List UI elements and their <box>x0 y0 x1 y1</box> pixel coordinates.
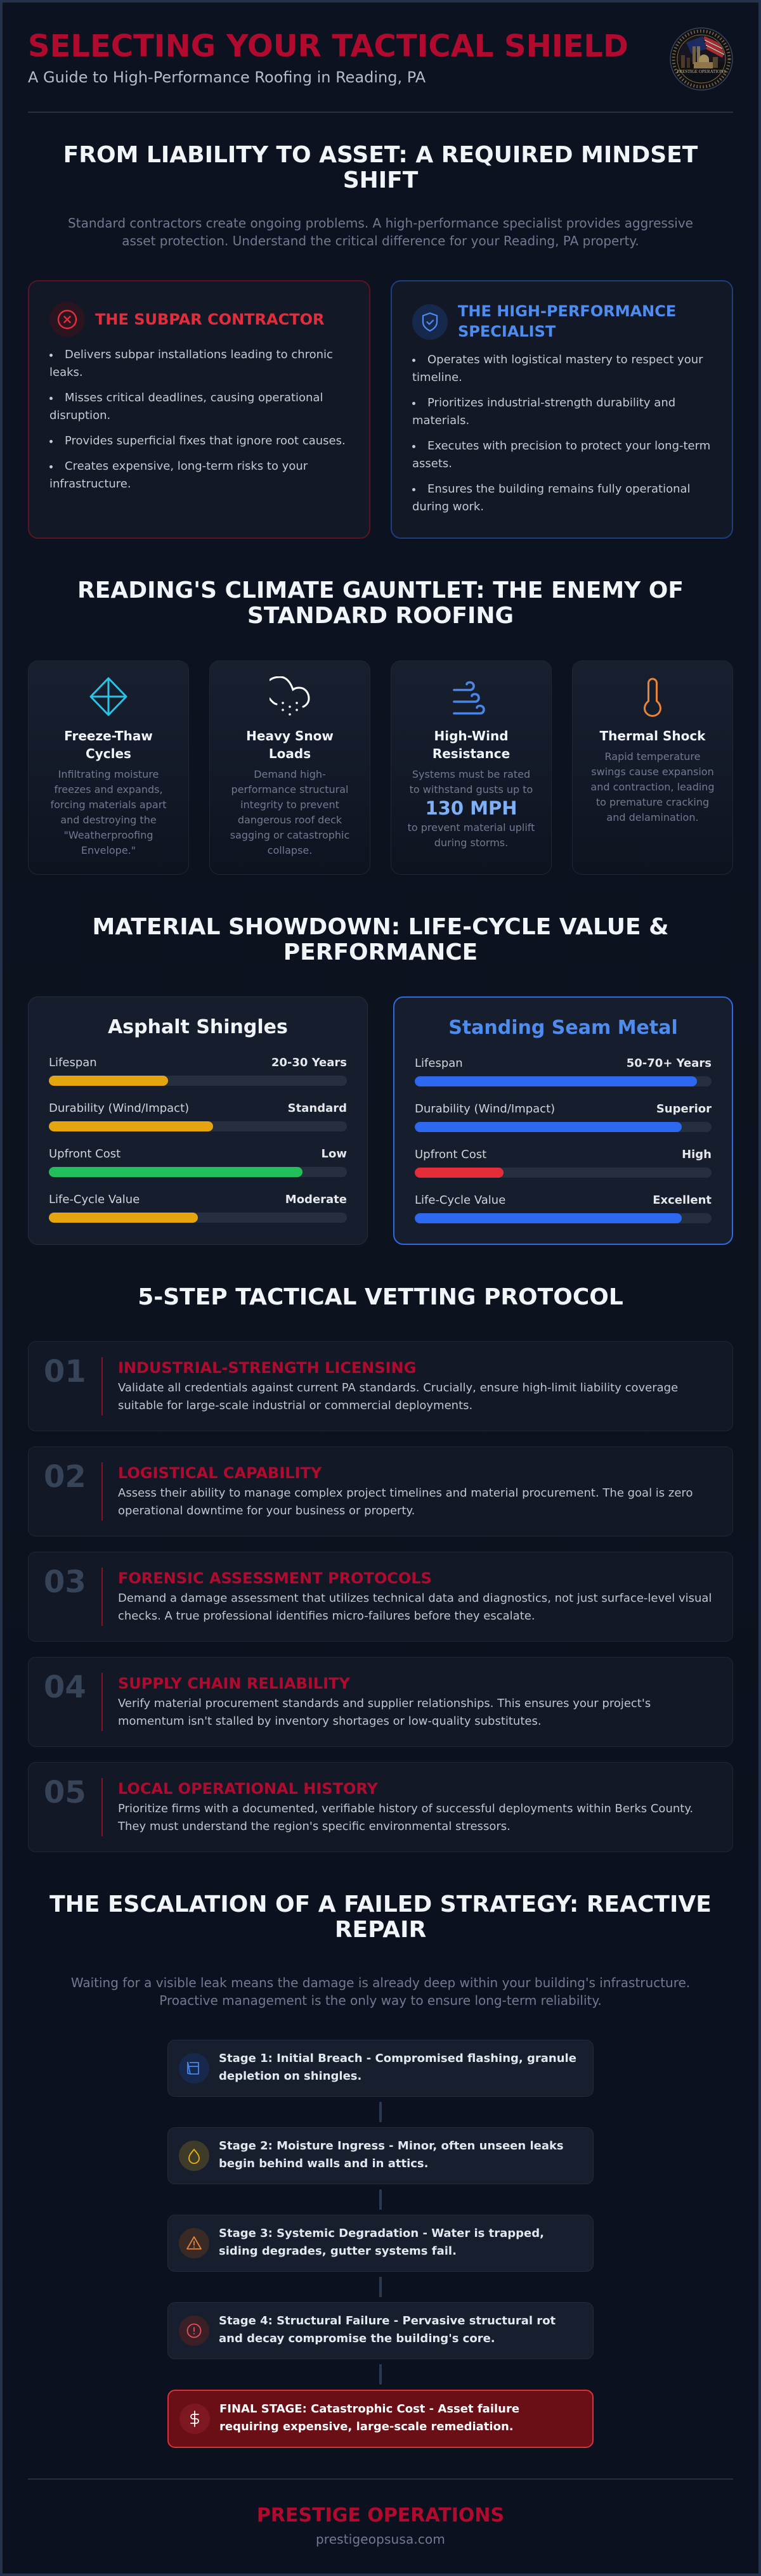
stage text: Stage 1: Initial Breach - Compromised flashing, granule <box>219 2052 576 2065</box>
heading: high-performance specialist: THE HIGH-PERFORMANCE <box>458 302 676 320</box>
icon: shield check <box>412 304 448 340</box>
metric: upfront cost <box>49 1147 347 1177</box>
logo: prestige operations seal: PRESTIGE OPERATIONS <box>677 69 726 74</box>
stage text: requiring expensive, large-scale remediation. <box>219 2420 514 2433</box>
stage text: siding degrades, gutter systems fail. <box>219 2244 457 2258</box>
intro text: mindset shift: asset protection. Understand the critical difference for your Reading, PA property. <box>122 233 639 248</box>
metric: life-cycle value <box>415 1194 712 1223</box>
step 02: LOGISTICAL CAPABILITY <box>118 1464 322 1482</box>
metric: lifespan: Lifespan <box>49 1056 97 1069</box>
step 04: Verify material procurement standards and supplier relationships. This ensures your project's <box>118 1697 651 1710</box>
step 01 <box>28 1341 733 1431</box>
step 01: 01 <box>44 1354 86 1389</box>
heading: subpar contractor: THE SUBPAR CONTRACTOR <box>95 311 324 328</box>
metric: durability: Durability (Wind/Impact) <box>49 1102 189 1115</box>
intro text: mindset shift <box>68 216 693 248</box>
panel: standing seam metal <box>393 996 733 1245</box>
heading: escalation: REPAIR <box>335 1917 426 1943</box>
step 02: 02 <box>44 1459 86 1495</box>
card text: sagging or catastrophic <box>230 829 349 841</box>
icon: thermometer <box>644 678 661 717</box>
stage text: begin behind walls and in attics. <box>219 2157 428 2170</box>
card text: Demand high- <box>254 768 326 780</box>
stage text: FINAL STAGE: Catastrophic Cost - Asset failure <box>219 2402 519 2416</box>
heading: mindset shift: SHIFT <box>343 167 418 193</box>
stat: 130 mph: 130 MPH <box>425 797 517 819</box>
card text: dangerous roof deck <box>238 814 342 826</box>
stage 3 <box>167 2215 594 2272</box>
final stage <box>167 2390 594 2448</box>
step 03: FORENSIC ASSESSMENT PROTOCOLS <box>118 1569 432 1587</box>
list: specialist strengths: Ensures the building remains fully operational during work. <box>412 482 691 513</box>
metric: durability: Durability (Wind/Impact) <box>415 1102 555 1116</box>
subtitle: A Guide to High-Performance Roofing in Reading, PA <box>28 68 426 86</box>
step 01: Validate all credentials against current PA standards. Crucially, ensure high-limit liability coverage <box>118 1381 678 1394</box>
card text: performance structural <box>231 783 348 795</box>
card text: freezes and expands, <box>54 783 163 795</box>
card text: "Weatherproofing <box>63 829 153 841</box>
icon: x in circle <box>49 302 85 337</box>
card text: Envelope." <box>81 844 136 856</box>
card title: Resistance <box>433 746 510 761</box>
card text: and contraction, leading <box>590 781 715 793</box>
step 02: operational downtime for your business or property. <box>118 1504 415 1517</box>
card text: to premature cracking <box>596 796 709 808</box>
step 03: Demand a damage assessment that utilizes technical data and diagnostics, not just surface-level visual <box>118 1592 712 1605</box>
intro text: escalation: Proactive management is the only way to ensure long-term reliability. <box>159 1993 602 2008</box>
intro text: escalation <box>71 1975 690 2008</box>
heading: vetting protocol: 5-STEP TACTICAL VETTING PROTOCOL <box>138 1284 623 1310</box>
list: specialist strengths: Prioritizes industrial-strength durability and materials. <box>412 396 675 427</box>
icon: breach <box>179 2053 209 2083</box>
icon: dollar <box>179 2404 210 2434</box>
card title: Thermal Shock <box>599 728 705 744</box>
heading: escalation: THE ESCALATION OF A FAILED STRATEGY: REACTIVE <box>49 1891 712 1917</box>
card: freeze-thaw <box>28 660 189 875</box>
stage text <box>219 2402 519 2433</box>
panel: subpar contractor <box>28 280 370 539</box>
step 05 <box>28 1762 733 1852</box>
step 02: Assess their ability to manage complex project timelines and material procurement. The goal is zero <box>118 1486 693 1500</box>
card title: Heavy Snow <box>246 728 334 744</box>
card text: forcing materials apart <box>50 799 167 811</box>
step 01: INDUSTRIAL-STRENGTH LICENSING <box>118 1359 416 1377</box>
card title: High-Wind <box>434 728 509 744</box>
heading: material showdown: MATERIAL SHOWDOWN: LIFE-CYCLE VALUE & <box>93 914 668 940</box>
card text: collapse. <box>268 844 312 856</box>
step 03: 03 <box>44 1564 86 1600</box>
step 03 <box>28 1552 733 1642</box>
card text: and destroying the <box>60 814 157 826</box>
card text <box>230 768 349 856</box>
stage 2 <box>167 2127 594 2184</box>
card text continued: during storms. <box>434 837 508 849</box>
icon: warning triangle <box>179 2228 209 2258</box>
metric: durability <box>49 1102 347 1131</box>
card text: Systems must be rated <box>412 768 530 780</box>
metric: life-cycle value: Moderate <box>285 1193 347 1206</box>
card: high wind <box>391 660 552 875</box>
list: specialist strengths: Operates with logistical mastery to respect your timeline. <box>412 353 703 384</box>
card text <box>50 768 167 856</box>
card text: and delamination. <box>606 811 699 823</box>
metric: lifespan: Lifespan <box>415 1057 463 1070</box>
panel: high-performance specialist <box>391 280 733 539</box>
stage text <box>219 2314 556 2345</box>
heading: material showdown: PERFORMANCE <box>283 939 478 965</box>
heading: high-performance specialist <box>458 302 676 340</box>
metric: upfront cost: Upfront Cost <box>415 1148 486 1161</box>
stage text: Stage 2: Moisture Ingress - Minor, often unseen leaks <box>219 2139 564 2153</box>
title: SELECTING YOUR TACTICAL SHIELD <box>28 29 628 64</box>
stage text <box>219 2227 544 2258</box>
icon: alert circle <box>179 2315 209 2346</box>
card text: Infiltrating moisture <box>58 768 159 780</box>
metric: life-cycle value: Life-Cycle Value <box>49 1193 140 1206</box>
heading: mindset shift: FROM LIABILITY TO ASSET: A REQUIRED MINDSET <box>63 142 698 168</box>
panel title: Asphalt Shingles <box>108 1016 288 1038</box>
connector <box>379 2102 382 2122</box>
metric: lifespan: 20-30 Years <box>271 1056 347 1069</box>
step 04 <box>28 1657 733 1747</box>
list: subpar contractor problems: Delivers subpar installations leading to chronic leaks. <box>49 348 333 379</box>
heading: material showdown <box>93 914 668 965</box>
heading: escalation <box>49 1891 712 1943</box>
connector <box>379 2189 382 2210</box>
list: subpar contractor problems: Misses critical deadlines, causing operational disruption. <box>49 391 323 422</box>
card text: to withstand gusts up to <box>410 783 533 795</box>
stage text: and decay compromise the building's core. <box>219 2332 495 2345</box>
card text <box>410 768 533 795</box>
step 04: momentum isn't stalled by inventory shortages or low-quality substitutes. <box>118 1715 542 1728</box>
step 05: They must understand the region's specific environmental stressors. <box>118 1820 511 1833</box>
intro text: mindset shift: Standard contractors create ongoing problems. A high-performance specialist provides aggressive <box>68 216 693 231</box>
step 04: SUPPLY CHAIN RELIABILITY <box>118 1675 350 1692</box>
step 04: 04 <box>44 1670 86 1705</box>
stage text <box>219 2139 564 2170</box>
card title <box>246 728 334 761</box>
card text: Rapid temperature <box>605 750 700 763</box>
step 05: Prioritize firms with a documented, verifiable history of successful deployments within Berks County. <box>118 1802 693 1815</box>
list: subpar contractor problems <box>49 348 346 491</box>
metric: upfront cost: Upfront Cost <box>49 1147 120 1161</box>
heading: climate gauntlet: READING'S CLIMATE GAUNTLET: THE ENEMY OF <box>77 577 684 603</box>
logo: prestige operations seal <box>670 27 733 91</box>
card title <box>64 728 153 761</box>
stage text: Stage 4: Structural Failure - Pervasive structural rot <box>219 2314 556 2328</box>
heading: mindset shift <box>63 142 698 193</box>
step 05: 05 <box>44 1775 86 1810</box>
step 03: checks. A true professional identifies micro-failures before they escalate. <box>118 1609 535 1623</box>
card text continued <box>408 821 535 849</box>
stage text <box>219 2052 576 2083</box>
connector <box>379 2364 382 2385</box>
metric: upfront cost: Low <box>322 1147 347 1161</box>
card text: swings cause expansion <box>591 766 714 778</box>
metric: life-cycle value: Excellent <box>653 1194 712 1207</box>
metric: upfront cost <box>415 1148 712 1178</box>
heading: climate gauntlet: STANDARD ROOFING <box>247 603 514 629</box>
heading: climate gauntlet <box>77 577 684 629</box>
intro text: escalation: Waiting for a visible leak means the damage is already deep within your building's infrastructure. <box>71 1975 690 1990</box>
panel title: Standing Seam Metal <box>448 1017 678 1039</box>
connector <box>379 2277 382 2297</box>
metric: durability: Standard <box>288 1102 347 1115</box>
step 05: LOCAL OPERATIONAL HISTORY <box>118 1780 378 1798</box>
card title <box>433 728 510 761</box>
card: thermal shock <box>572 660 733 875</box>
panel: asphalt shingles <box>28 996 368 1245</box>
card text: integrity to prevent <box>240 799 339 811</box>
stage 1 <box>167 2040 594 2097</box>
card: heavy snow <box>209 660 370 875</box>
icon: wind <box>453 681 485 715</box>
step 02 <box>28 1446 733 1536</box>
metric: upfront cost: High <box>682 1148 712 1161</box>
list: subpar contractor problems: Provides superficial fixes that ignore root causes. <box>65 434 346 448</box>
metric: life-cycle value <box>49 1193 347 1223</box>
footer brand: PRESTIGE OPERATIONS <box>257 2504 504 2527</box>
metric: life-cycle value: Life-Cycle Value <box>415 1194 505 1207</box>
metric: lifespan <box>415 1057 712 1086</box>
metric: lifespan <box>49 1056 347 1086</box>
stage text: depletion on shingles. <box>219 2070 361 2083</box>
card title: Loads <box>269 746 311 761</box>
stage 4 <box>167 2302 594 2359</box>
card text <box>590 750 715 823</box>
icon: water drop <box>179 2141 209 2171</box>
card title: Cycles <box>86 746 131 761</box>
metric: durability: Superior <box>656 1102 712 1116</box>
metric: lifespan: 50-70+ Years <box>627 1057 712 1070</box>
list: specialist strengths: Executes with precision to protect your long-term assets. <box>412 439 710 470</box>
metric: durability <box>415 1102 712 1132</box>
stage text: Stage 3: Systemic Degradation - Water is trapped, <box>219 2227 544 2240</box>
footer url: prestigeopsusa.com <box>316 2532 445 2547</box>
card text continued: to prevent material uplift <box>408 821 535 834</box>
list: subpar contractor problems: Creates expensive, long-term risks to your infrastructure. <box>49 460 308 491</box>
icon: ice diamond <box>90 677 127 716</box>
heading: high-performance specialist: SPECIALIST <box>458 323 556 340</box>
list: specialist strengths <box>412 353 710 513</box>
step 01: suitable for large-scale industrial or commercial deployments. <box>118 1399 472 1412</box>
icon: snow cloud <box>270 676 309 716</box>
card title: Freeze-Thaw <box>64 728 153 744</box>
